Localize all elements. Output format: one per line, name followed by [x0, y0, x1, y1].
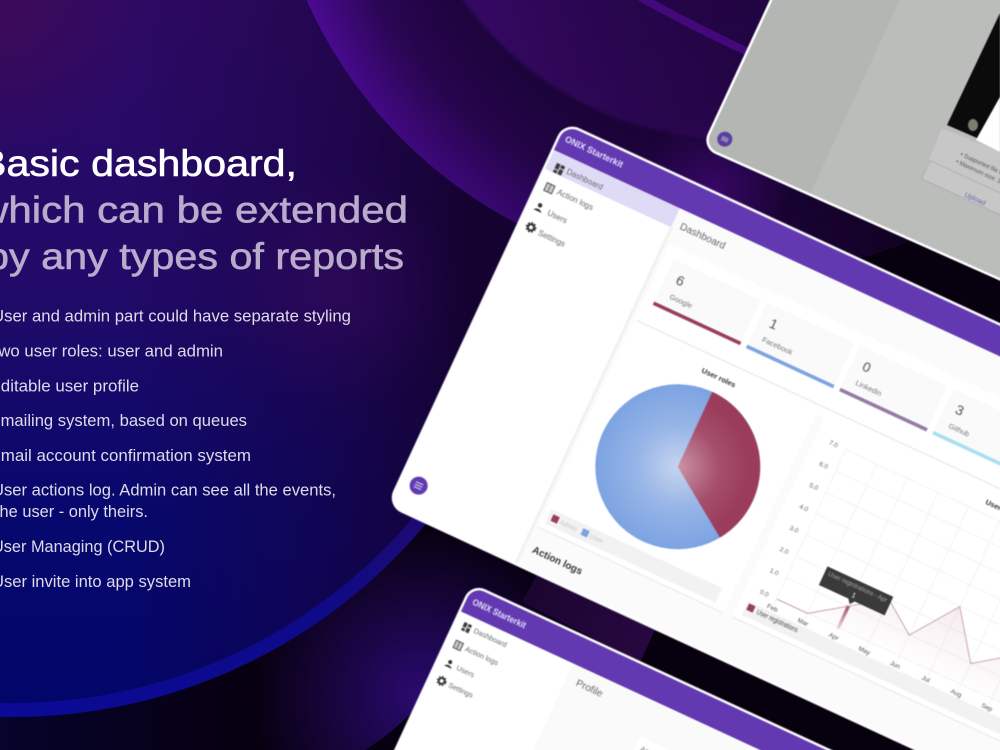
- stat: Linkedin: [839, 346, 947, 431]
- y axis labels: 5.0: [808, 482, 819, 492]
- x axis labels: Mar: [796, 617, 810, 629]
- icon: action logs small: [453, 640, 463, 651]
- feature list: [0, 308, 351, 591]
- sidebar divider: [514, 227, 673, 565]
- app title: ONIX Starterkit: [563, 134, 625, 171]
- stat: Github: [932, 389, 1000, 475]
- upload screen (dimmed): [706, 0, 1000, 282]
- pie chart panel: [531, 321, 823, 616]
- page heading: Dashboard: [678, 221, 727, 252]
- icon: action logs: [544, 183, 555, 194]
- profile heading: Profile: [574, 678, 605, 700]
- pie title: User roles: [700, 366, 737, 389]
- x axis labels: Aug: [949, 688, 963, 699]
- stat panel: [631, 244, 1000, 645]
- tooltip: User registrations - Apr: [827, 571, 888, 604]
- pie legend strip: User: [588, 533, 604, 545]
- profile main area: [409, 663, 1000, 750]
- stat: Google: Google: [668, 292, 694, 310]
- data line: [777, 536, 1000, 713]
- x axis labels: Jun: [889, 660, 901, 671]
- y axis labels: 1.0: [768, 567, 780, 578]
- stat: Linkedin: Linkedin: [854, 378, 883, 398]
- sidebar menu: Dashboard: [565, 167, 604, 192]
- profile sidebar menu: [447, 626, 509, 704]
- y axis labels: 7.0: [828, 439, 839, 450]
- hover pointer: [836, 605, 850, 629]
- x axis labels: Feb: [766, 603, 779, 614]
- profile sidebar menu: Users: [455, 663, 476, 680]
- profile screen: [393, 587, 834, 750]
- stat: Facebook: Facebook: [761, 335, 795, 357]
- stat: Github: Github: [947, 421, 971, 439]
- menu button: [407, 474, 431, 498]
- y axis labels: 3.0: [788, 525, 800, 535]
- profile sidebar menu: Action logs: [464, 644, 500, 668]
- x axis labels: May: [857, 645, 872, 657]
- icon: dashboard small: [461, 622, 472, 633]
- dashboard screen: [388, 123, 1000, 750]
- stat: Linkedin: 0: [860, 358, 874, 376]
- pie legend strip: Admin: [558, 519, 578, 533]
- line chart panel: [732, 417, 1000, 750]
- icon: settings: [525, 221, 537, 234]
- profile sidebar menu: Settings: [447, 681, 475, 700]
- y axis labels: 0.0: [759, 589, 770, 599]
- heading: [0, 143, 408, 277]
- sidebar menu: Action logs: [556, 188, 595, 212]
- screen border: [388, 123, 1000, 750]
- stat: Facebook: 1: [767, 315, 781, 333]
- y axis labels: [759, 439, 839, 599]
- profile sidebar menu: Dashboard: [472, 626, 508, 649]
- upload box: Upload: [963, 192, 987, 207]
- pie chart: [595, 384, 760, 549]
- pie legend strip: [545, 509, 722, 603]
- feature list: User and admin part could have separate styling: [0, 308, 351, 326]
- stat: Google: 6: [673, 272, 687, 290]
- menu button dimmed: [715, 129, 735, 149]
- icon: dashboard: [553, 163, 565, 176]
- icon: users small: [444, 659, 455, 669]
- active menu row: [544, 149, 680, 227]
- x axis labels: Apr: [828, 632, 840, 643]
- tooltip: 1: [850, 592, 857, 600]
- sidebar menu: [537, 167, 604, 253]
- action logs heading: Action logs: [530, 545, 584, 578]
- sidebar menu: Users: [546, 208, 569, 225]
- stat: Google: [653, 259, 761, 345]
- area under line: [777, 536, 1000, 713]
- photo preview: [947, 13, 1000, 152]
- y axis labels: 2.0: [778, 546, 790, 556]
- chart grid: [774, 450, 1000, 734]
- sidebar menu: Settings: [537, 228, 567, 249]
- main area: [515, 208, 1000, 750]
- icon: users: [533, 201, 545, 213]
- chart legend strip: [742, 601, 1000, 750]
- x axis labels: [766, 603, 994, 714]
- stat: Github: 3: [953, 401, 967, 419]
- x axis labels: Jul: [920, 675, 931, 685]
- header bar: [553, 128, 1000, 358]
- feature list: User actions log. Admin can see all the events,: [0, 482, 336, 500]
- profile header bar: [460, 590, 828, 750]
- chart legend strip: User registrations: [755, 609, 799, 635]
- tooltip: [817, 566, 893, 620]
- stat: Facebook: [746, 302, 854, 388]
- upload panel: [922, 128, 1000, 214]
- y axis labels: 4.0: [798, 503, 810, 514]
- profile app title: ONIX Starterkit: [471, 597, 528, 630]
- upload box: [922, 160, 1000, 229]
- profile screen border: [295, 585, 1000, 750]
- y axis labels: 6.0: [818, 461, 829, 471]
- x axis labels: Sep: [980, 702, 994, 714]
- icon: settings small: [436, 675, 448, 687]
